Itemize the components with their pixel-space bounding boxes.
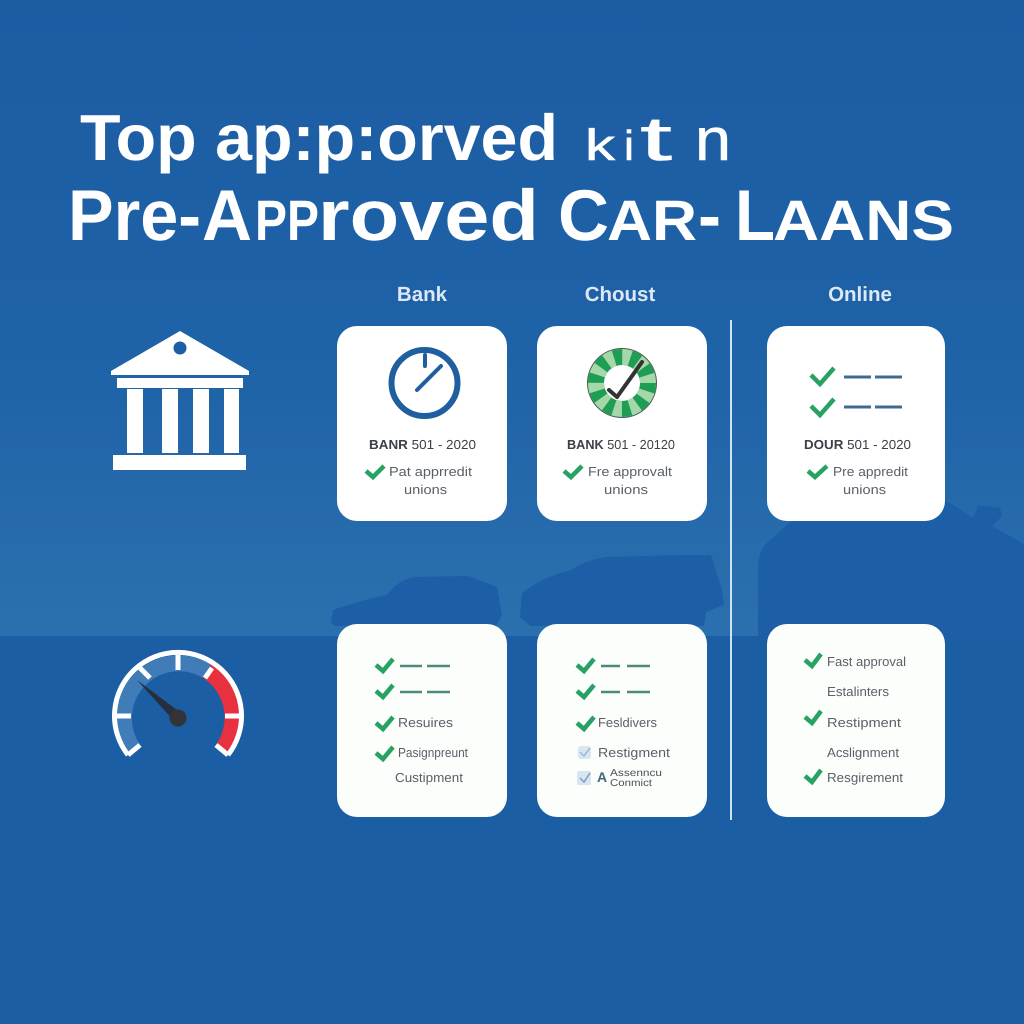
title: roved bbox=[318, 176, 539, 256]
panel: online card top bbox=[767, 326, 945, 521]
panel: online card bottom bbox=[767, 624, 945, 817]
icon: clock bbox=[392, 350, 458, 416]
background silhouette: large car bbox=[520, 555, 724, 626]
title: C bbox=[558, 176, 609, 256]
checklist rows: Conmict bbox=[610, 778, 652, 789]
icon: green approval badge bbox=[587, 348, 657, 418]
title: AR bbox=[607, 189, 697, 253]
title: A bbox=[202, 176, 252, 256]
checklist rows: Custipment bbox=[395, 770, 463, 785]
column heading: Online: Online bbox=[828, 283, 892, 306]
title: i bbox=[624, 122, 634, 169]
panel: bank card top bbox=[337, 326, 507, 521]
checklist rows bbox=[577, 659, 670, 789]
feature rows: Estalinters bbox=[827, 684, 889, 699]
title: t bbox=[640, 105, 672, 174]
card text: label and check bbox=[564, 437, 675, 497]
card text: label and check: DOUR 501 - 2020 bbox=[804, 437, 911, 452]
feature rows: Acslignment bbox=[827, 745, 899, 760]
title bbox=[68, 101, 954, 256]
title: Top ap:p:orved bbox=[80, 101, 558, 174]
column heading: Choust: Choust bbox=[585, 283, 655, 306]
card text: label and check: Pat apprredit bbox=[389, 464, 472, 479]
card text: label and check: Fre approvalt bbox=[588, 464, 672, 479]
card text: label and check bbox=[366, 437, 476, 497]
checklist rows: Pasignpreunt bbox=[398, 745, 468, 760]
title: n bbox=[695, 106, 731, 173]
divider line bbox=[730, 320, 732, 820]
background silhouette: small car bbox=[331, 576, 502, 626]
card text: label and check: unions bbox=[843, 482, 887, 497]
feature rows: Fast approval bbox=[827, 654, 906, 669]
checklist rows: Restigment bbox=[598, 745, 670, 760]
card text: label and check: unions bbox=[404, 482, 448, 497]
icon: speedometer gauge bbox=[114, 652, 242, 755]
background silhouette: large vehicle bbox=[758, 500, 1024, 636]
card text: label and check: Pre appredit bbox=[833, 464, 908, 479]
title: Pre- bbox=[68, 176, 201, 256]
feature rows bbox=[805, 654, 906, 785]
card text: label and check: unions bbox=[604, 482, 649, 497]
title: L bbox=[735, 176, 775, 256]
title: PP bbox=[255, 189, 319, 253]
column heading: Bank: Bank bbox=[397, 283, 448, 306]
feature rows: Resgirement bbox=[827, 770, 903, 785]
icon: checklist bbox=[811, 368, 902, 415]
checklist rows: Resuires bbox=[398, 715, 454, 730]
title: k bbox=[585, 121, 616, 170]
checklist rows: Fesldivers bbox=[598, 715, 657, 730]
checklist rows bbox=[376, 659, 468, 785]
icon: bank building bbox=[111, 331, 249, 470]
feature rows: Restipment bbox=[827, 715, 901, 730]
panel: choust card top bbox=[537, 326, 707, 521]
title: - bbox=[698, 176, 721, 256]
checklist rows: Assenncu bbox=[610, 768, 662, 779]
card text: label and check: BANR 501 - 2020 bbox=[369, 437, 476, 452]
panel: bank card bottom bbox=[337, 624, 507, 817]
card text: label and check: BANK 501 - 20120 bbox=[567, 437, 675, 452]
title: AANS bbox=[773, 189, 954, 253]
panel: choust card bottom bbox=[537, 624, 707, 817]
card text: label and check bbox=[804, 437, 911, 497]
checklist rows: A bbox=[597, 769, 607, 785]
